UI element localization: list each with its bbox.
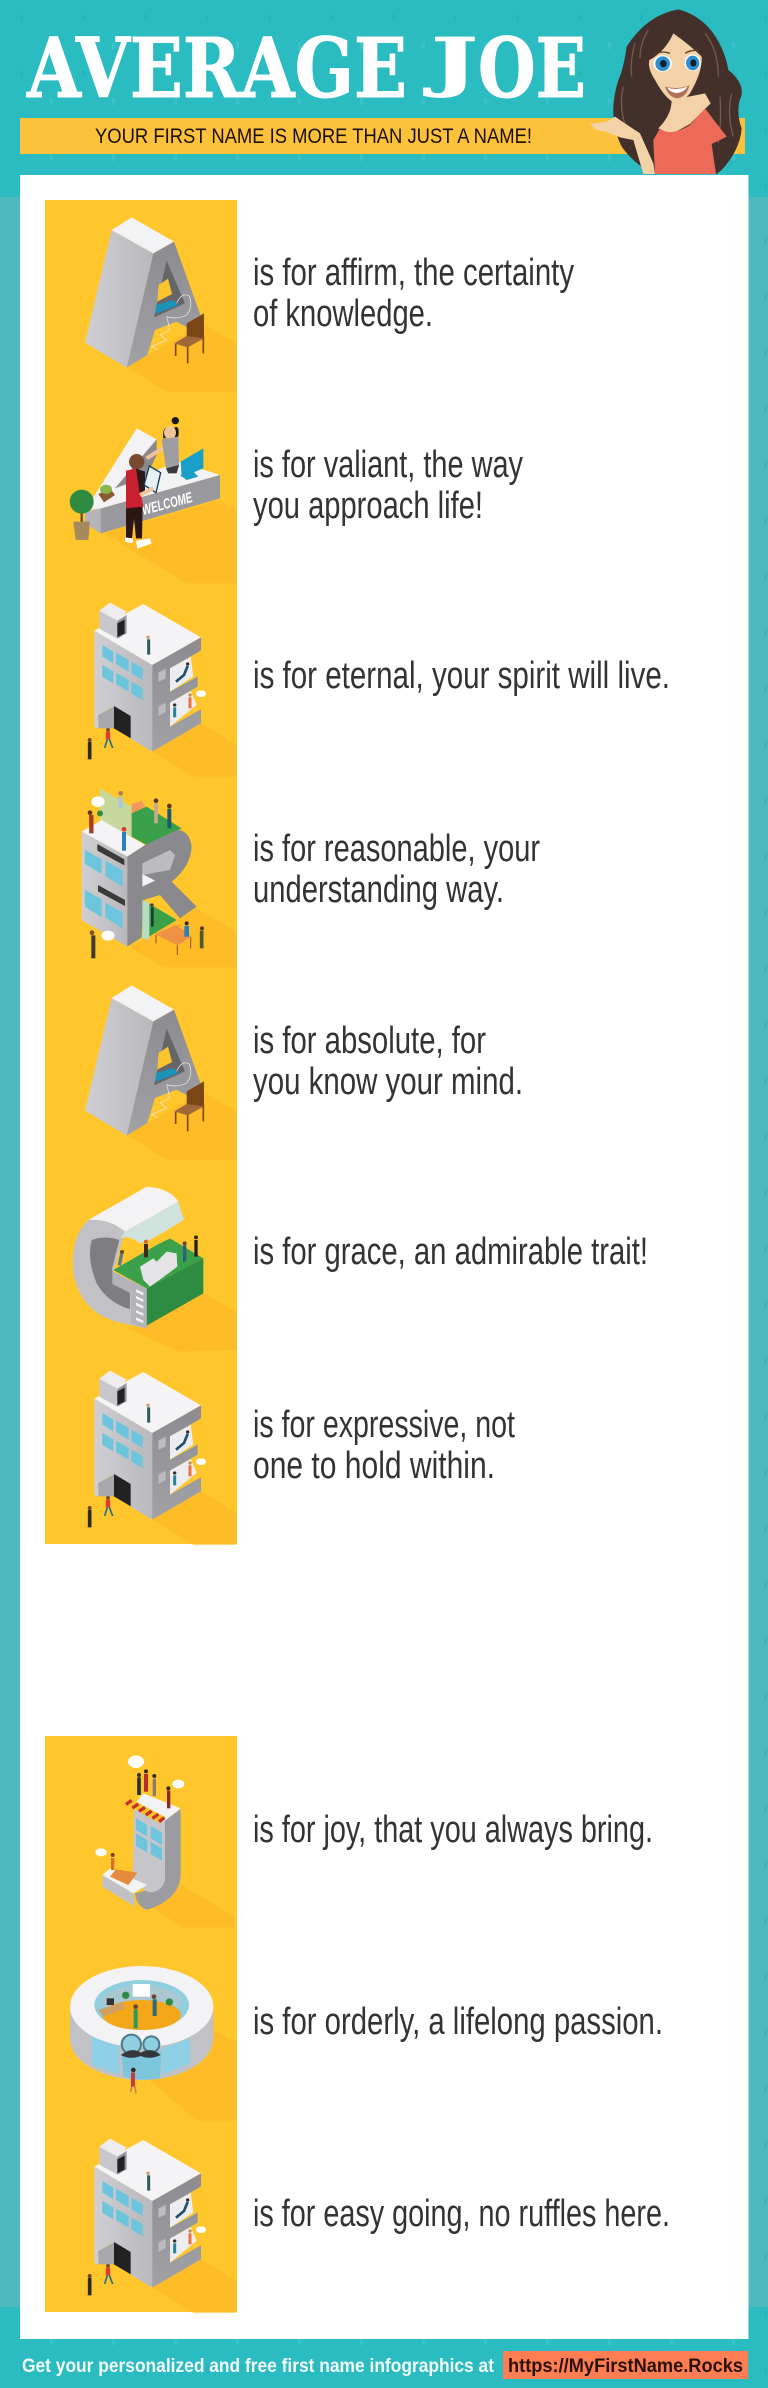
icon: letter E building repeat	[88, 1371, 237, 1545]
icon: letter V welcome desk: WELCOME	[140, 490, 195, 519]
subtitle banner	[20, 118, 745, 154]
text: G row: is for grace, an admirable trait!	[253, 1231, 648, 1273]
header title: J	[423, 25, 478, 100]
text: R row: is for reasonable, your	[253, 828, 540, 870]
text: second A row: you know your mind.	[253, 1061, 523, 1103]
footer url badge: https://MyFirstName.Rocks	[508, 2356, 743, 2377]
icon: letter E building	[88, 603, 237, 777]
icon: letter A building repeat	[85, 985, 237, 1160]
panel: yellow tile column top	[45, 200, 237, 1544]
icon: letter V welcome desk	[70, 417, 237, 583]
text: V row: is for valiant, the way	[253, 444, 523, 486]
icon: letter J building	[95, 1755, 235, 1927]
icon: letter E building final	[88, 2139, 237, 2313]
text: second A row: is for absolute, for	[253, 1020, 486, 1062]
text: R row	[253, 828, 540, 911]
text: A row: is for affirm, the certainty	[253, 252, 574, 294]
header title: OE	[478, 21, 586, 117]
text: A row	[253, 252, 574, 335]
text: second E row: is for expressive, not	[253, 1404, 515, 1446]
icon: cartoon woman presenter	[590, 9, 742, 174]
text: second A row	[253, 1020, 523, 1103]
text: J row: is for joy, that you always bring.	[253, 1809, 653, 1851]
text: V row: you approach life!	[253, 485, 483, 527]
text: R row: understanding way.	[253, 869, 504, 911]
text: A row: of knowledge.	[253, 293, 433, 335]
icon: letter A building	[85, 217, 237, 392]
panel: yellow tile column bottom	[45, 1736, 237, 2312]
icon: letter R building	[82, 788, 237, 967]
subtitle banner: YOUR FIRST NAME IS MORE THAN JUST A NAME!	[95, 124, 532, 148]
footer call to action: Get your personalized and free first name infographics at	[22, 2356, 495, 2377]
icon: letter O building	[70, 1966, 237, 2121]
text: V row	[253, 444, 523, 527]
text: second E row	[253, 1404, 515, 1487]
icon: letter G building	[73, 1187, 237, 1352]
text: second E row: one to hold within.	[253, 1445, 495, 1487]
header title: AVERAGE	[26, 21, 407, 117]
